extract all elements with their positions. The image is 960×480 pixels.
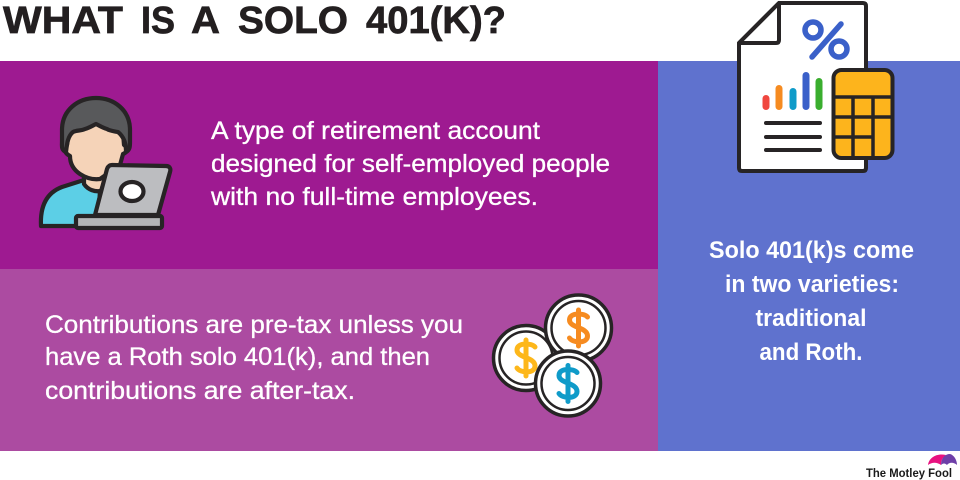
icon: calculator [833, 70, 893, 158]
title: A [191, 0, 220, 42]
text: definition: designed for self-employed people [211, 150, 610, 178]
text: definition: with no full-time employees. [210, 183, 538, 211]
bar chart [766, 76, 819, 106]
title: 401(K)? [366, 0, 506, 42]
title: IS [141, 0, 175, 42]
logo: The Motley Fool [866, 454, 957, 480]
text: definition [210, 117, 610, 211]
panel: definition [0, 61, 658, 269]
title: SOLO [238, 0, 348, 42]
text: varieties: and Roth. [760, 339, 862, 366]
icon: coins [494, 295, 612, 416]
text lines [766, 123, 820, 150]
logo: The Motley Fool: The Motley Fool [866, 468, 952, 480]
text: contributions [45, 311, 463, 405]
text: contributions: have a Roth solo 401(k), and then [45, 343, 430, 371]
icon: jester hat [928, 454, 957, 465]
icon: percent sign [805, 22, 847, 57]
text: contributions: contributions are after-tax. [45, 377, 355, 405]
icon: document with calculator [739, 3, 893, 171]
text: varieties: Solo 401(k)s come [709, 237, 914, 264]
icon: person with laptop [41, 98, 170, 228]
text: contributions: Contributions are pre-tax unless you [45, 311, 463, 339]
title: WHAT [3, 0, 123, 42]
text: varieties: in two varieties: [725, 271, 899, 298]
panel: contributions [0, 269, 658, 451]
text: definition: A type of retirement account [211, 117, 540, 145]
title [3, 0, 506, 42]
text: varieties [709, 237, 914, 366]
panel: varieties [658, 61, 960, 451]
text: varieties: traditional [756, 305, 866, 332]
